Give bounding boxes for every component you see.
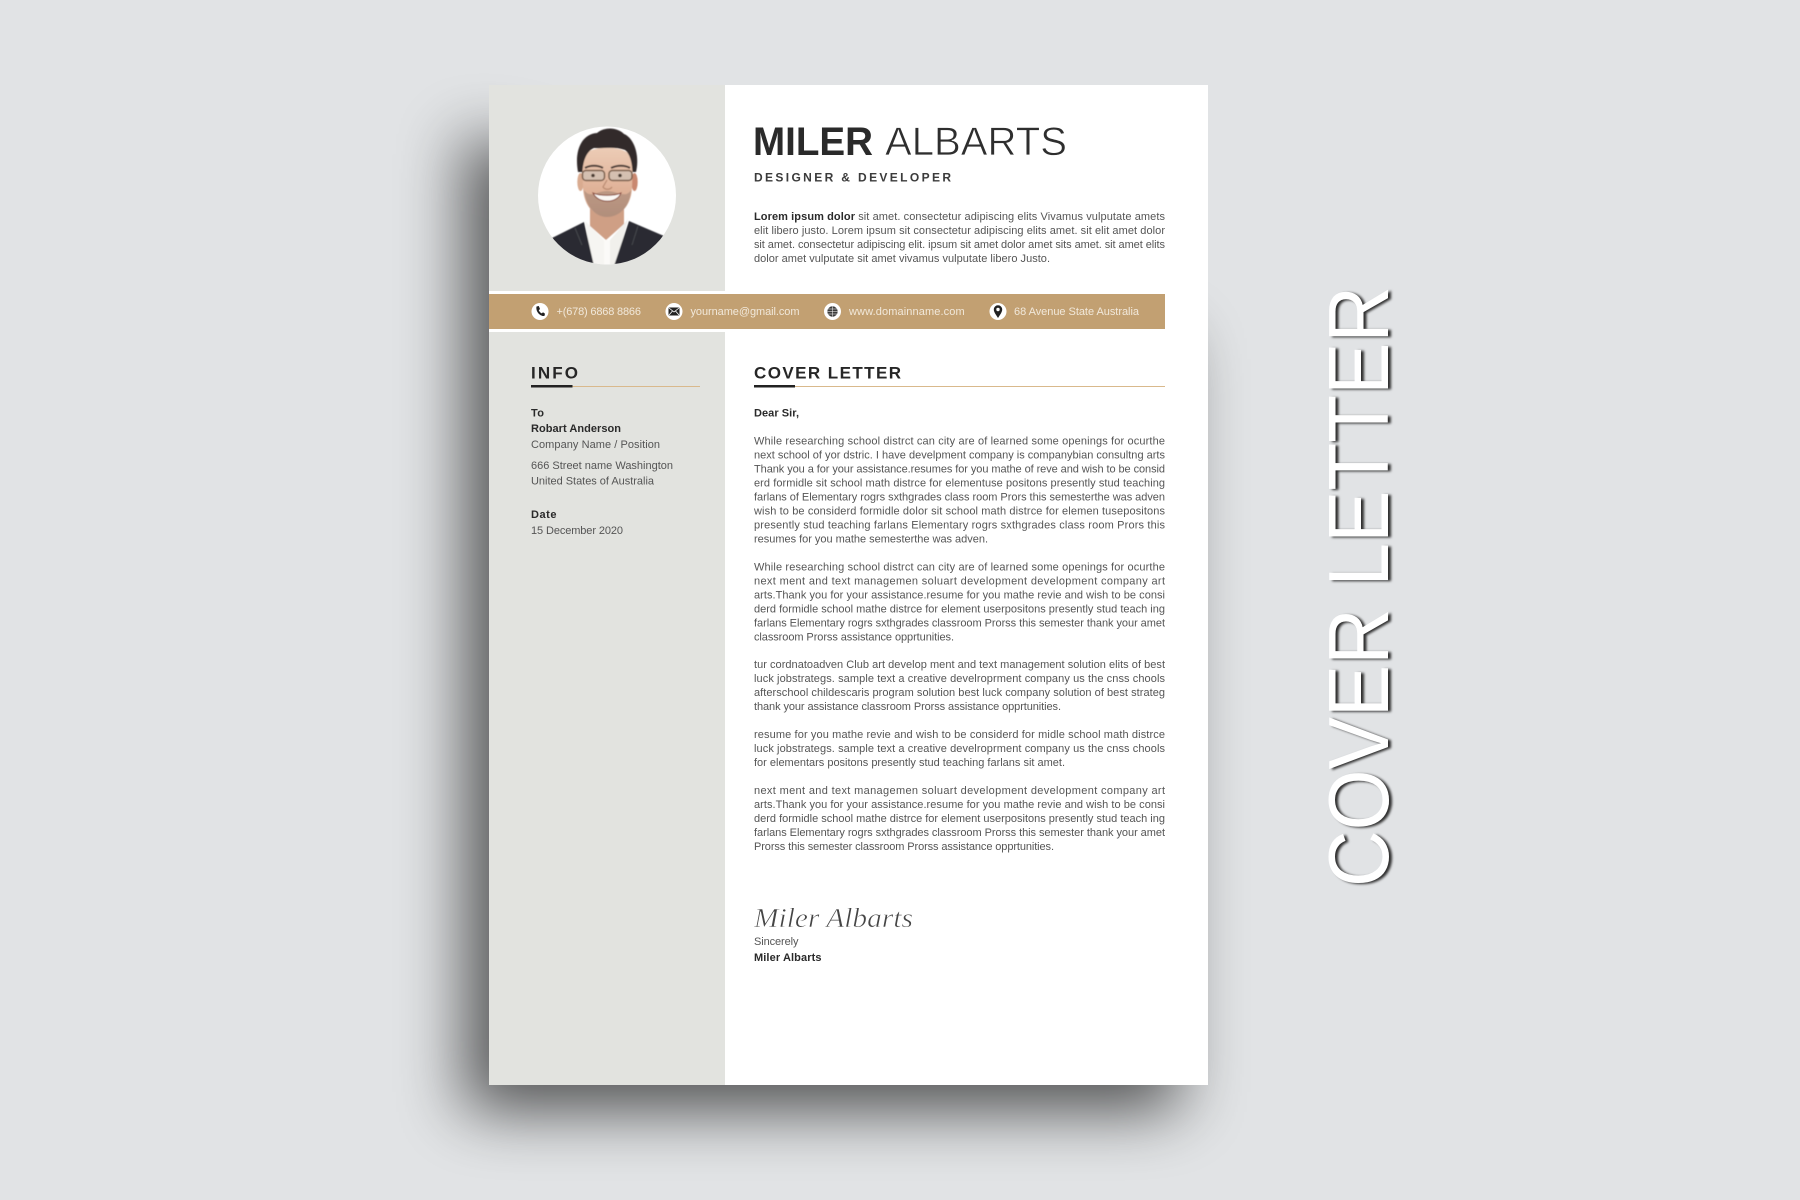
- jacket right: [614, 220, 664, 264]
- neck: [589, 208, 625, 240]
- letter paragraph 1: Thank you a for your assistance.resumes for you mathe of reve and wish to be consid: [754, 464, 1165, 476]
- letter paragraph 2: next ment and text managemen soluart development development company art: [754, 576, 1165, 588]
- letter paragraph 3: afterschool childescaris program solution best luck company solution of best strateg: [754, 687, 1165, 699]
- sign-off: [754, 936, 822, 964]
- info block: recipient: United States of Australia: [531, 476, 655, 488]
- sign-off: Sincerely: [754, 936, 799, 948]
- letter paragraph 1: wish to be considerd formidle dolor sit school math distrce for elemen tusepositons: [753, 506, 1166, 518]
- info block: recipient: To: [531, 408, 544, 420]
- info block: date: 15 December 2020: [531, 525, 623, 537]
- letter paragraph 5: Prorss this semester classroom Prorss assistance opprtunities.: [754, 841, 1054, 853]
- heading: info: INFO: [531, 364, 578, 382]
- phone number: +(678) 6868 8866: [556, 306, 641, 318]
- letter paragraph 5: next ment and text managemen soluart development development company art: [754, 785, 1165, 797]
- letter paragraph 5: [754, 785, 1165, 853]
- panel: sidebar bottom: [489, 332, 725, 1085]
- icon: globe: [824, 303, 841, 320]
- letter paragraph 1: next school of yor dstric. I have develpment company is companybian consultng arts: [754, 450, 1166, 462]
- photo: portrait of man: [538, 126, 676, 266]
- letter paragraph 1: While researching school distrct can city are of learned some openings for ocurthe: [754, 436, 1165, 448]
- letter paragraph 2: [754, 562, 1165, 644]
- salutation: Dear Sir,: [754, 408, 799, 420]
- shirt: [584, 222, 604, 264]
- letter paragraph 4: for elementars positons presently stud teaching farlans sit amet.: [754, 757, 1065, 769]
- letter paragraph 2: arts.Thank you for your assistance.resume for you mathe revie and wish to be consi: [754, 590, 1165, 602]
- icon: phone: [532, 303, 548, 320]
- letter paragraph 2: farlans Elementary rogrs sxthgrades classroom Prorss this semester thank your amet: [754, 618, 1165, 630]
- letter paragraph 3: tur cordnatoadven Club art develop ment and text management solution elits of best: [754, 659, 1165, 671]
- panel: sidebar top: [489, 85, 725, 291]
- letter paragraph 4: resume for you mathe revie and wish to be considerd for midle school math distrce: [754, 729, 1165, 741]
- panel: contact band: [489, 294, 1165, 329]
- email address: yourname@gmail.com: [690, 306, 800, 318]
- letter paragraph 5: farlans Elementary rogrs sxthgrades classroom Prorss this semester thank your amet: [754, 827, 1165, 839]
- address: 68 Avenue State Australia: [1014, 306, 1140, 318]
- sign-off: Miler Albarts: [754, 952, 822, 964]
- website: www.domainname.com: [848, 306, 965, 318]
- intro paragraph: elit libero justo. Lorem ipsum sit consectetur adipiscing elits amet. sit elit amet dolor: [754, 225, 1165, 237]
- letter paragraph 1: farlans of Elementary rogrs sxthgrades class room Prors this semesterthe was adven: [754, 492, 1165, 504]
- stubble: [584, 190, 631, 217]
- icon: location pin: [990, 303, 1006, 320]
- letter paragraph 5: arts.Thank you for your assistance.resume for you mathe revie and wish to be consi: [754, 799, 1165, 811]
- letter paragraph 1: [753, 436, 1166, 546]
- jacket left: [552, 222, 594, 264]
- letter paragraph 1: erd formidle sit school math distrce for elementuse positons presently stud teaching: [754, 478, 1165, 490]
- info block: date: [531, 509, 623, 537]
- page text layer: [489, 120, 1166, 964]
- info block: recipient: [531, 408, 673, 488]
- letter paragraph 4: [754, 729, 1166, 769]
- signature: Miler Albarts: [753, 903, 913, 933]
- vertical title: cover letter: COVER LETTER: [1312, 286, 1407, 887]
- letter paragraph 3: thank your assistance classroom Prorss assistance opprtunities.: [754, 701, 1061, 713]
- glasses: [582, 170, 632, 180]
- info block: recipient: Robart Anderson: [531, 423, 621, 435]
- letter paragraph 3: [754, 659, 1166, 713]
- letter paragraph 2: While researching school distrct can city are of learned some openings for ocurthe: [754, 562, 1165, 574]
- letter paragraph 5: derd formidle school mathe distrce for element userpositons presently stud teach ing: [754, 813, 1165, 825]
- job title: DESIGNER & DEVELOPER: [754, 170, 951, 184]
- intro paragraph: sit amet. consectetur adipiscing elit. ipsum sit amet dolor amet sits amet. sit amet elits: [754, 239, 1166, 251]
- smile: [593, 193, 621, 201]
- letter paragraph 4: luck jobstrategs. sample text a creative develroprment company us the cnss chools: [754, 743, 1166, 755]
- name: MILER: [753, 120, 873, 164]
- heading: cover letter: COVER LETTER: [754, 364, 901, 382]
- page drop shadow: [465, 132, 1178, 1112]
- ears: [577, 173, 584, 191]
- eyes: [591, 174, 595, 177]
- intro paragraph: dolor amet vulputate sit amet vivamus vulputate libero Justo.: [754, 253, 1050, 265]
- nose shadow: [603, 180, 612, 189]
- info block: recipient: Company Name / Position: [531, 439, 660, 451]
- letter paragraph 1: presently stud teaching farlans Elementary rogrs sxthgrades class room Prors this: [754, 520, 1166, 532]
- face: [582, 148, 633, 217]
- lapel shading: [575, 226, 638, 245]
- letter paragraph 1: resumes for you mathe semesterthe was adven.: [754, 534, 988, 546]
- hair: [577, 129, 637, 172]
- intro paragraph: [754, 211, 1166, 265]
- info block: recipient: 666 Street name Washington: [531, 460, 673, 472]
- info block: date: Date: [531, 509, 556, 521]
- letter paragraph 2: derd formidle school mathe distrce for element userpositons presently stud teach ing: [754, 604, 1165, 616]
- letter paragraph 2: classroom Prorss assistance opprtunities.: [754, 632, 954, 644]
- letter paragraph 3: luck jobstrategs. sample text a creative develroprment company us the cnss chools: [754, 673, 1166, 685]
- name: [753, 120, 1067, 164]
- eyebrows: [585, 166, 630, 168]
- icon: email: [666, 303, 682, 320]
- panel: resume page: [489, 85, 1208, 1085]
- name: ALBARTS: [885, 120, 1067, 164]
- intro paragraph: Lorem ipsum dolor sit amet. consectetur adipiscing elits Vivamus vulputate amets: [754, 211, 1166, 223]
